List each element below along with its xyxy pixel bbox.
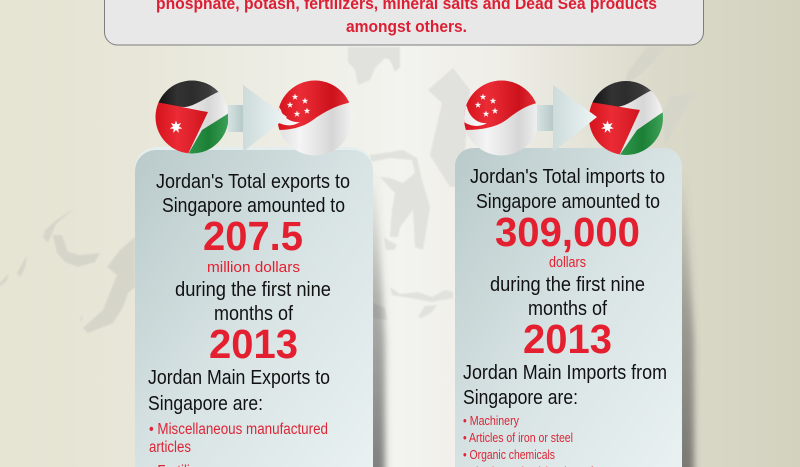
panel: imports (455, 148, 694, 467)
text block: main imports: Singapore are: (463, 386, 578, 409)
icon: Jordan flag right (589, 81, 663, 156)
list: exports: articles (149, 439, 191, 456)
header text: amongst others. (346, 18, 467, 36)
panel: exports (135, 147, 385, 467)
text block: main imports: Jordan Main Imports from (463, 361, 667, 384)
list: exports: • Miscellaneous manufactured (149, 421, 328, 438)
text block: exports summary: Jordan's Total exports to (156, 170, 350, 193)
text block: main exports (148, 366, 330, 467)
text block: imports summary: dollars (549, 254, 586, 271)
list: imports: • Machinery (463, 414, 520, 428)
icon: arrow left (228, 85, 287, 152)
icon: Singapore flag right (464, 80, 540, 156)
text block: exports summary: 207.5 (203, 213, 303, 259)
text block: exports summary: months of (214, 302, 293, 325)
icon: Singapore flag left (277, 80, 353, 156)
text block: imports summary: 309,000 (495, 209, 640, 255)
text block: main exports: Jordan Main Exports to (148, 366, 330, 389)
text block: exports summary: million dollars (207, 259, 300, 276)
list: imports: • Organic chemicals (463, 448, 555, 462)
text block: imports summary: months of (528, 297, 607, 320)
header panel (104, 0, 704, 45)
icon: Jordan flag left (155, 80, 229, 156)
text block: imports summary: 2013 (523, 316, 612, 362)
text block: exports summary: 2013 (209, 321, 298, 367)
text block: exports summary (156, 170, 350, 367)
list: exports (149, 421, 328, 467)
text block: exports summary: Singapore amounted to (162, 194, 345, 217)
text block: imports summary: Jordan's Total imports to (470, 165, 665, 188)
text block: main exports: Singapore are: (148, 392, 263, 415)
icon: arrow right (537, 85, 597, 152)
list: imports: • Articles of iron or steel (463, 431, 573, 445)
text block: main imports (463, 361, 667, 467)
header text (156, 0, 657, 36)
world map silhouette (0, 47, 698, 333)
text block: exports summary: during the first nine (175, 278, 331, 301)
text block: imports summary: Singapore amounted to (476, 190, 660, 213)
text block: imports summary (470, 165, 665, 362)
list: imports (463, 414, 593, 467)
text block: imports summary: during the first nine (490, 273, 645, 296)
